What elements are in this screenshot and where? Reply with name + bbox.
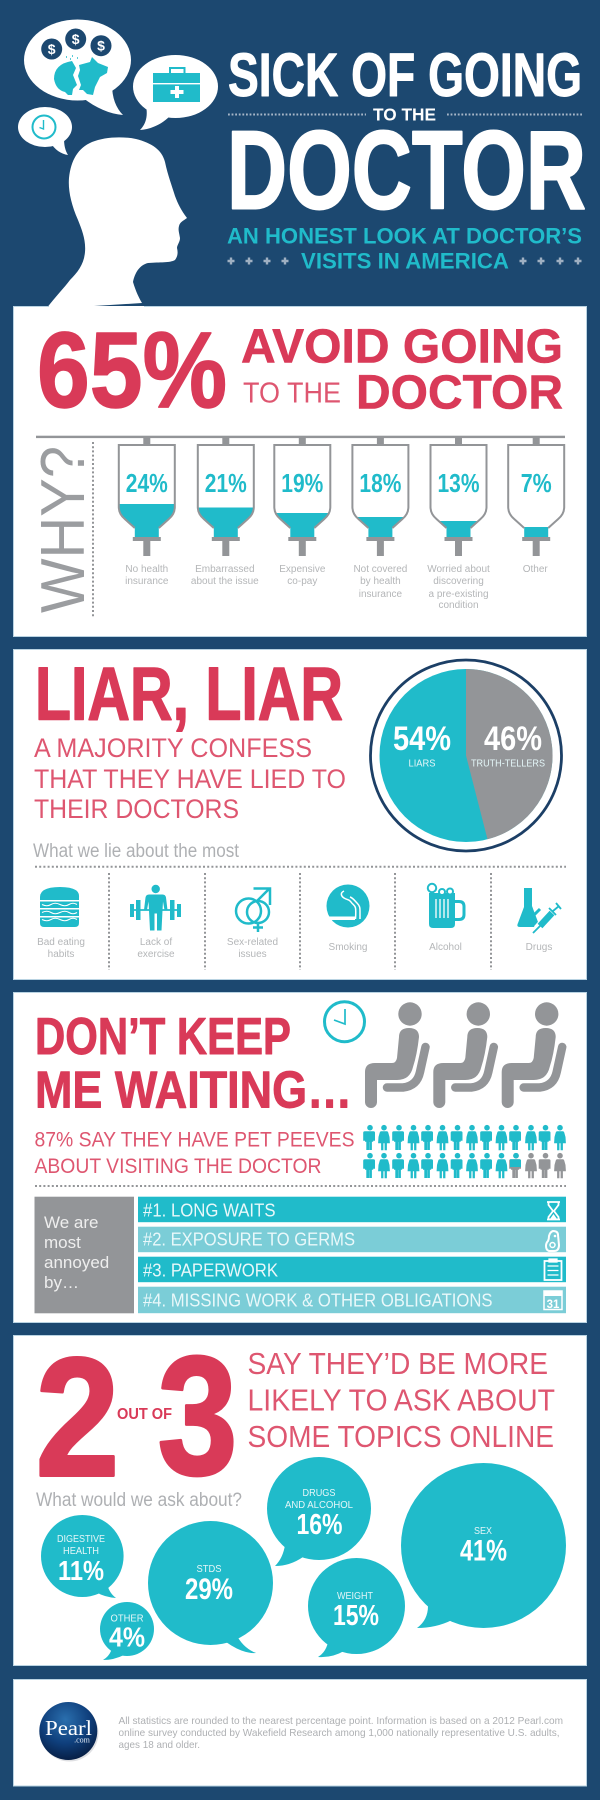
- iv bag: 18%: by health: [360, 576, 401, 587]
- why label: WHY?: [29, 446, 98, 613]
- subheading: 87% pet peeves: [34, 1128, 354, 1178]
- caption: exercise: [137, 949, 175, 960]
- speech bubble: money and broken piggy bank: $: [48, 41, 56, 57]
- bubble: digestive health 11%: 11%: [58, 1555, 104, 1586]
- subheading: majority confess: [34, 733, 346, 824]
- bubble: digestive health 11%: HEALTH: [63, 1545, 99, 1557]
- iv bag: 19%: [274, 437, 330, 587]
- caption: Sex-related: [227, 937, 278, 948]
- person 2: [433, 1002, 494, 1108]
- icon: burger: [37, 887, 85, 960]
- pie chart: liars vs truth-tellers: [370, 660, 562, 851]
- iv bag: 7%: Other: [523, 564, 548, 575]
- bubble: weight 15%: 15%: [333, 1600, 379, 1632]
- subheading: LIKELY TO ASK ABOUT: [248, 1382, 555, 1418]
- bubble: drugs and alcohol 16%: [267, 1457, 371, 1566]
- methodology note: [118, 1715, 563, 1751]
- caption: habits: [48, 949, 74, 960]
- panel: don't keep me waiting: [14, 992, 586, 1322]
- caption: issues: [238, 949, 267, 960]
- pearl logo: Pearl: [45, 1716, 92, 1740]
- caption: Alcohol: [429, 942, 462, 953]
- bubble: drugs and alcohol 16%: 16%: [296, 1509, 343, 1541]
- bar: missing work: 31: [547, 1299, 560, 1311]
- bar: exposure to germs: #2. EXPOSURE TO GERMS: [143, 1230, 355, 1250]
- iv bag: 7%: 7%: [521, 468, 552, 498]
- subheading: 87% pet peeves: 87% SAY THEY HAVE PET PEEVES: [34, 1128, 354, 1152]
- headline: to the: TO THE: [243, 378, 341, 410]
- bubble: other 4%: OTHER: [110, 1612, 144, 1624]
- iv bag: 24%: [119, 437, 175, 587]
- caption: Drugs: [526, 942, 552, 953]
- bubble: digestive health 11%: [41, 1515, 124, 1598]
- pie chart: liars vs truth-tellers: 46%: [484, 720, 542, 758]
- speech bubble: money and broken piggy bank: [24, 20, 131, 115]
- bubble: stds 29%: [148, 1521, 273, 1653]
- person 1: [365, 1002, 426, 1108]
- heading: ME WAITING…: [35, 1062, 352, 1120]
- subheading: majority confess: A MAJORITY CONFESS: [34, 733, 312, 763]
- person 3: [502, 1002, 562, 1108]
- bar: long waits: [138, 1197, 566, 1222]
- subheading: 87% pet peeves: ABOUT VISITING THE DOCTOR: [34, 1154, 322, 1178]
- waiting people: [365, 1002, 562, 1108]
- pictogram: 87% of people: [363, 1125, 566, 1178]
- iv bag: 21%: [191, 437, 259, 587]
- head silhouette: [46, 137, 187, 309]
- speech bubble: money and broken piggy bank: $: [97, 38, 105, 54]
- icon: beer mug: [428, 884, 464, 953]
- bubble: sex 41%: SEX: [474, 1525, 492, 1537]
- gray box: we are most annoyed by: annoyed: [44, 1253, 109, 1272]
- big number 3: 3: [158, 1321, 238, 1510]
- iv bag: 24%: No health: [125, 564, 168, 575]
- pie chart: liars vs truth-tellers: LIARS: [408, 758, 436, 770]
- bar: missing work: [138, 1287, 566, 1313]
- iv bag: 19%: Expensive: [279, 564, 326, 575]
- caption: Bad eating: [37, 937, 85, 948]
- question: what would we ask: What would we ask about?: [36, 1490, 242, 1511]
- iv bag: 19%: 19%: [281, 468, 323, 498]
- bar: missing work: #4. MISSING WORK & OTHER OBLIGATIONS: [143, 1290, 492, 1310]
- bar: paperwork: [138, 1257, 566, 1282]
- methodology note: All statistics are rounded to the nearest percentage point. Information is based on a 2012 Pearl.com: [118, 1715, 563, 1727]
- bubble: other 4%: 4%: [109, 1622, 145, 1652]
- subheading: SAY THEY’D BE MORE: [248, 1346, 548, 1381]
- iv bag: 21%: 21%: [205, 468, 247, 498]
- subtitle line 2 with plus marks: VISITS IN AMERICA: [301, 248, 509, 274]
- bar: exposure to germs: [138, 1227, 566, 1252]
- pearl logo: [39, 1702, 98, 1762]
- iv bag: 13%: 13%: [438, 468, 480, 498]
- bubble: stds 29%: STDS: [196, 1563, 222, 1575]
- pie chart: liars vs truth-tellers: TRUTH-TELLERS: [471, 758, 545, 770]
- iv bag: 13%: [427, 437, 490, 611]
- headline: doctor: DOCTOR: [356, 366, 563, 420]
- subheading: SOME TOPICS ONLINE: [248, 1419, 554, 1454]
- subheading: [248, 1346, 555, 1454]
- panel: footer: [14, 1680, 586, 1786]
- caption: Lack of: [140, 937, 172, 948]
- iv bag: 13%: condition: [438, 600, 479, 611]
- iv bag: 13%: Worried about: [427, 564, 490, 575]
- iv bag: 24%: insurance: [125, 576, 169, 587]
- subheading: majority confess: THEIR DOCTORS: [34, 794, 239, 824]
- icon: gender symbols: [227, 888, 278, 960]
- iv bag: 18%: insurance: [359, 589, 403, 600]
- bubble: stds 29%: 29%: [185, 1573, 233, 1606]
- iv bag: 13%: discovering: [433, 576, 484, 587]
- bubble: other 4%: [100, 1602, 154, 1660]
- big number 2: 2: [36, 1322, 120, 1512]
- subheading: what we lie about: What we lie about the most: [33, 841, 240, 862]
- heading: liar, liar: LIAR, LIAR: [35, 652, 343, 736]
- title: to the with dotted rules: TO THE: [373, 104, 436, 124]
- bubble: digestive health 11%: DIGESTIVE: [57, 1533, 105, 1545]
- pearl logo: .com: [74, 1736, 91, 1744]
- bar: paperwork: #3. PAPERWORK: [143, 1260, 278, 1280]
- iv bag: 18%: [352, 437, 408, 600]
- methodology note: online survey conducted by Wakefield Research among 1,000 nationally representative U.S. adults,: [118, 1727, 560, 1739]
- heading: DON’T KEEP: [35, 1008, 291, 1066]
- panel: 2 out of 3: [14, 1321, 586, 1666]
- iv bag: 18%: Not covered: [353, 564, 407, 575]
- methodology note: ages 18 and older.: [118, 1739, 200, 1751]
- bubble: sex 41%: 41%: [460, 1534, 507, 1568]
- icon: bong and syringe: [517, 888, 561, 953]
- gray box: we are most annoyed by: We are: [44, 1213, 98, 1232]
- bubble: weight 15%: [308, 1558, 405, 1657]
- panel: 65% avoid going to the doctor: [14, 306, 586, 636]
- gray box: we are most annoyed by: [34, 1197, 134, 1313]
- bubble: sex 41%: [401, 1463, 566, 1628]
- heading: [35, 1008, 352, 1120]
- iv bag: 7%: [508, 437, 564, 575]
- bubble: weight 15%: WEIGHT: [337, 1590, 373, 1602]
- panel: liar, liar: [14, 650, 586, 980]
- subheading: majority confess: THAT THEY HAVE LIED TO: [34, 764, 346, 794]
- gray box: we are most annoyed by: by…: [44, 1273, 79, 1292]
- bubble: drugs and alcohol 16%: AND ALCOHOL: [285, 1499, 353, 1511]
- hanging rail: [36, 436, 565, 438]
- speech bubble: medical kit: [133, 55, 218, 130]
- iv bag: 21%: Embarrassed: [195, 564, 255, 575]
- iv bag: 19%: co-pay: [287, 576, 317, 587]
- icon: wall clock: [324, 1002, 364, 1042]
- header: [18, 20, 586, 309]
- pie chart: liars vs truth-tellers: 54%: [393, 720, 451, 758]
- bar: long waits: #1. LONG WAITS: [143, 1200, 276, 1220]
- bubble: drugs and alcohol 16%: DRUGS: [302, 1487, 336, 1499]
- caption: Smoking: [329, 942, 367, 953]
- speech bubble: money and broken piggy bank: $: [72, 31, 80, 47]
- speech bubble: clock: [18, 107, 72, 155]
- subtitle line 1: AN HONEST LOOK AT DOCTOR’S: [227, 224, 582, 248]
- iv bag: 24%: 24%: [126, 468, 168, 498]
- headline number 65%: 65%: [37, 309, 227, 430]
- icon: smoking: [326, 884, 370, 953]
- iv bag: 18%: 18%: [359, 468, 401, 498]
- subtitle line 2 with plus marks: [228, 248, 582, 274]
- iv bag: 21%: about the issue: [191, 576, 259, 587]
- iv bag: 13%: a pre-existing: [428, 589, 489, 600]
- out of: OUT OF: [117, 1406, 172, 1423]
- icon: weight lifter: [130, 885, 181, 960]
- headline: avoid going: AVOID GOING: [241, 320, 563, 374]
- gray box: we are most annoyed by: most: [44, 1233, 81, 1252]
